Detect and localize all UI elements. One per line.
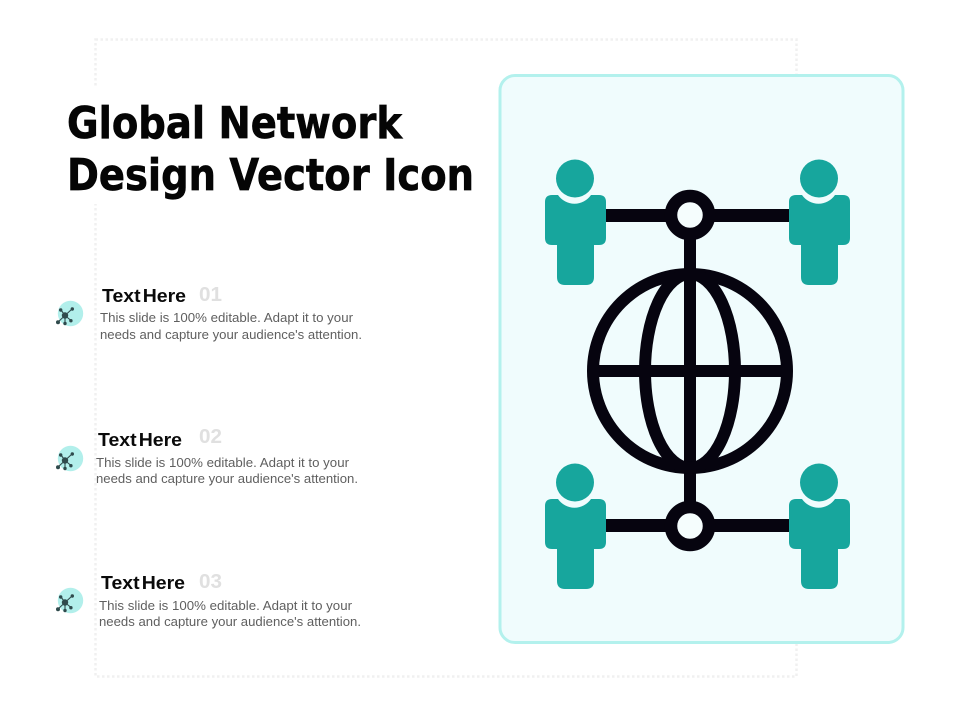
title: Global Network bbox=[67, 98, 404, 149]
item 2 bbox=[56, 426, 358, 486]
item 2 description: needs and capture your audience's attention. bbox=[96, 471, 358, 486]
item 3 description bbox=[99, 598, 361, 629]
panel: network illustration bbox=[500, 76, 903, 642]
item 1 description: This slide is 100% editable. Adapt it to your bbox=[100, 310, 354, 325]
item 2 heading: Text Here bbox=[98, 430, 182, 450]
icon: person bottom left bbox=[545, 464, 606, 589]
dotted frame bbox=[96, 40, 796, 676]
icon: network badge 1 bbox=[56, 301, 83, 326]
item 1 heading: Text Here bbox=[102, 286, 186, 306]
title: Design Vector Icon bbox=[67, 150, 474, 201]
icon: person bottom right bbox=[789, 464, 850, 589]
icon: person top right bbox=[789, 160, 850, 285]
item 2 number: 02 bbox=[199, 426, 222, 448]
item 3 bbox=[56, 571, 361, 629]
item 1 description: needs and capture your audience's attention. bbox=[100, 327, 362, 342]
item 2 description bbox=[96, 455, 358, 486]
icon: network badge 2 bbox=[56, 446, 83, 471]
item 3 number: 03 bbox=[199, 571, 222, 593]
item 3 description: This slide is 100% editable. Adapt it to your bbox=[99, 598, 353, 613]
icon: globe network bbox=[593, 196, 795, 545]
item 3 heading: Text Here bbox=[101, 573, 185, 593]
title bbox=[67, 98, 474, 201]
icon: bottom hub bbox=[671, 507, 709, 545]
item 2 description: This slide is 100% editable. Adapt it to your bbox=[96, 455, 350, 470]
item 1 number: 01 bbox=[199, 284, 222, 306]
item 3 description: needs and capture your audience's attention. bbox=[99, 614, 361, 629]
icon: person top left bbox=[545, 160, 606, 285]
connector lines bbox=[600, 209, 795, 532]
item 1 description bbox=[100, 310, 362, 342]
icon: network badge 3 bbox=[56, 588, 83, 613]
icon: globe bbox=[593, 274, 787, 468]
icon: top hub bbox=[671, 196, 709, 234]
item 1 bbox=[56, 284, 362, 342]
